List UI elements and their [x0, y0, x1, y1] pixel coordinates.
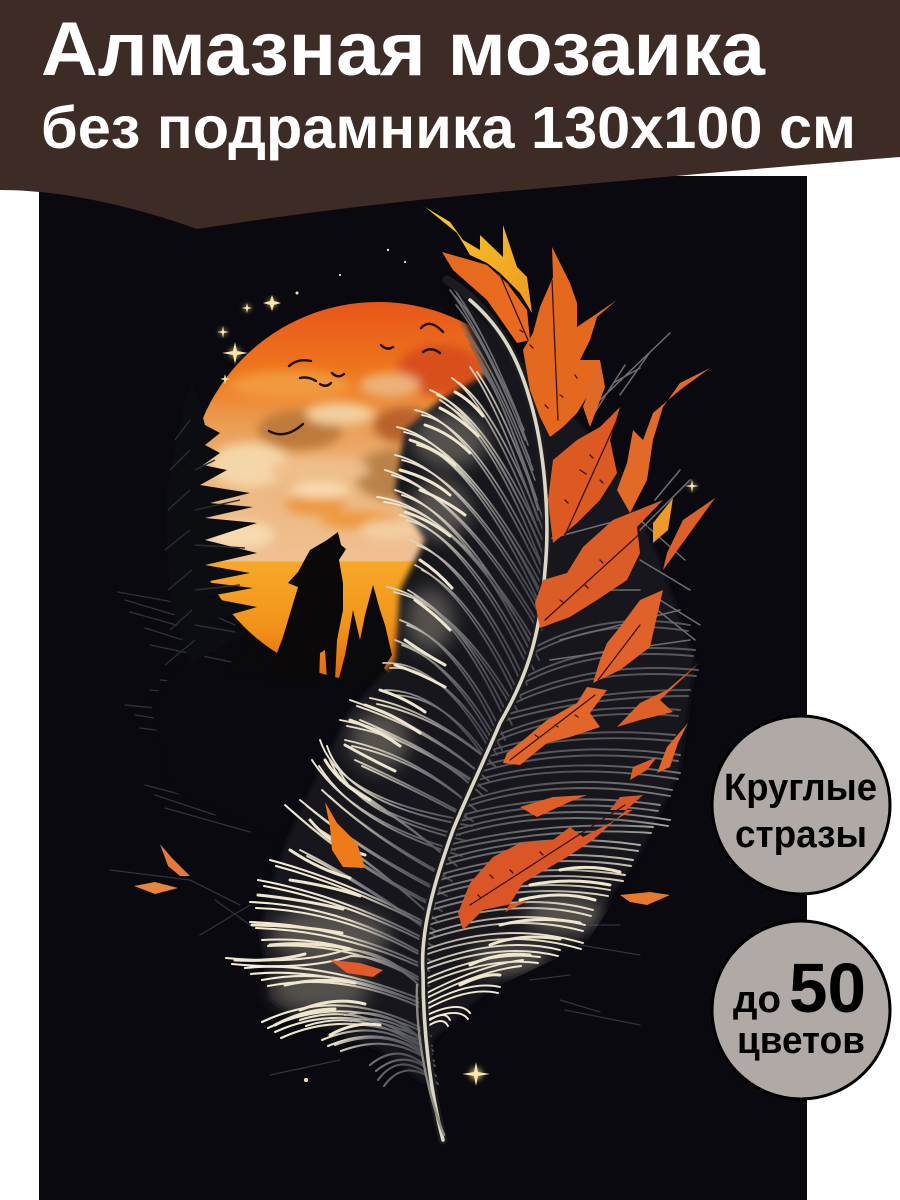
- barbs upper left density: [384, 372, 548, 765]
- moon: [200, 302, 490, 678]
- leaf: long flame: [617, 368, 710, 513]
- leaf: mid feather: [325, 802, 365, 868]
- leaf: lower feather: [330, 960, 383, 977]
- leaf: right tip: [617, 662, 700, 727]
- leaf: far left upper: [160, 844, 190, 876]
- leaf veins and speckles: [470, 275, 655, 905]
- leaf: right floating: [620, 892, 670, 905]
- feather body: [260, 280, 695, 1085]
- leaf: sliver: [520, 795, 587, 817]
- cream highlights glow: [270, 412, 605, 1012]
- leaf: top yellow: [425, 207, 532, 313]
- leaf: bottom long: [458, 795, 643, 930]
- big conifer: [165, 380, 257, 665]
- leaf: long lower: [503, 687, 607, 765]
- badge: round rhinestones: стразы: [735, 814, 867, 856]
- barbs lower right: [423, 621, 698, 1020]
- leaf: right flame: [663, 498, 715, 570]
- hill silhouette: [150, 655, 395, 840]
- barbs upper left: [377, 367, 541, 760]
- title line 2: без подрамника 130х100 см: [41, 95, 856, 161]
- badge: round rhinestones: [712, 716, 890, 894]
- barbs middle left density: [292, 704, 495, 936]
- badge: up to 50 colours: [712, 921, 890, 1099]
- barbs middle left: [285, 698, 488, 930]
- leaf: second top: [442, 252, 530, 343]
- badge: up to 50 colours: до: [733, 979, 781, 1021]
- barbs lower left density: [232, 866, 438, 1086]
- leaf: big mid: [548, 407, 620, 543]
- panel: artwork: [39, 176, 807, 1200]
- badge: up to 50 colours: цветов: [737, 1020, 865, 1062]
- barbs lower right density: [421, 627, 696, 1026]
- cream tufts: [235, 392, 620, 1035]
- leaf: lower flame: [593, 590, 663, 683]
- header banner: [0, 0, 900, 229]
- birds: [269, 324, 443, 434]
- feather: [226, 280, 700, 1140]
- forest background: [110, 592, 640, 1075]
- leaf: small yellow: [653, 498, 673, 543]
- title line 1: Алмазная мозаика: [41, 7, 766, 92]
- badge: round rhinestones: Круглые: [724, 767, 877, 809]
- small trees: [338, 585, 396, 682]
- orange leaves: [134, 207, 715, 977]
- shaft: [417, 280, 547, 1140]
- leaf: narrow: [583, 360, 605, 427]
- leaf: far left lower: [134, 882, 178, 894]
- badge: up to 50 colours: 50: [789, 949, 866, 1027]
- leaf: centre: [535, 500, 663, 628]
- stars: [217, 249, 699, 1086]
- leaf: small: [630, 757, 657, 780]
- leaf: small right: [657, 723, 688, 773]
- wolf: [266, 532, 346, 682]
- barbs lower left: [226, 860, 432, 1080]
- barbs top band: [447, 280, 538, 510]
- leaf: upper large: [523, 247, 617, 437]
- barbs upper right: [540, 333, 700, 660]
